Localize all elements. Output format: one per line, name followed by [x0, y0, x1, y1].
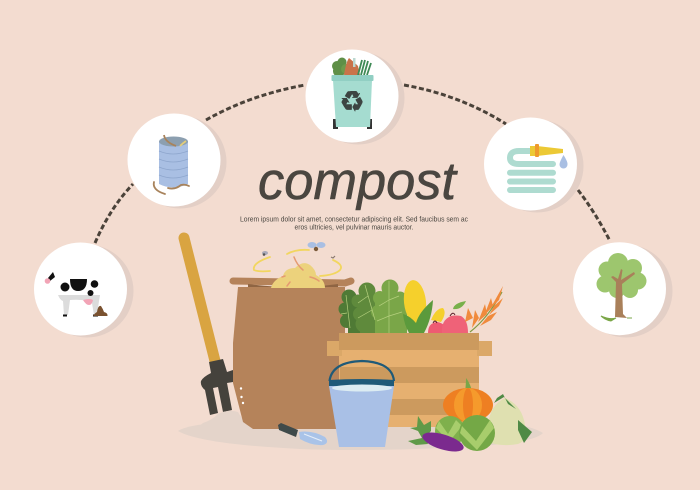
herb leaves	[408, 416, 431, 445]
icon: greens in bin	[332, 58, 371, 77]
step: tree	[573, 242, 672, 338]
icon: hose	[510, 144, 568, 190]
description text: Lorem ipsum dolor sit amet, consectetur adipiscing elit. Sed faucibus sem ac	[240, 216, 468, 224]
step: garden hose	[484, 118, 584, 212]
dashed arc path	[95, 85, 610, 243]
apples	[428, 301, 468, 333]
buttons	[240, 387, 244, 404]
wheat	[465, 286, 503, 332]
corn husks	[403, 300, 433, 333]
icon: recycling bin body	[332, 75, 374, 129]
small corn and leaf	[431, 308, 445, 322]
eggplant	[420, 429, 466, 455]
step: worms	[128, 114, 226, 208]
corn	[402, 279, 428, 325]
water bucket	[329, 361, 394, 447]
title: compost	[258, 152, 458, 211]
garden trowel	[278, 423, 327, 445]
compost bag	[233, 257, 351, 429]
description text	[240, 216, 468, 232]
icon: tree	[596, 253, 646, 321]
icon: recycling symbol: ♻	[339, 85, 365, 118]
wooden crate	[327, 333, 492, 427]
cabbages	[435, 415, 495, 451]
leafy greens	[338, 280, 408, 334]
icon: worm bin	[154, 135, 189, 194]
compost pile	[271, 263, 325, 288]
description text: eros ultricies, vel pulvinar mauris auctor.	[294, 224, 414, 232]
odour swirls	[254, 250, 341, 276]
ground shadow	[178, 420, 543, 450]
pumpkin	[443, 378, 493, 422]
flies	[262, 242, 335, 258]
icon: cow	[45, 272, 100, 316]
pale squash	[488, 394, 532, 445]
pitchfork	[184, 238, 233, 415]
step: cow manure	[34, 242, 134, 338]
icon: manure pile	[93, 306, 108, 316]
soil mound	[196, 411, 258, 436]
step: recycling bin	[306, 50, 404, 144]
